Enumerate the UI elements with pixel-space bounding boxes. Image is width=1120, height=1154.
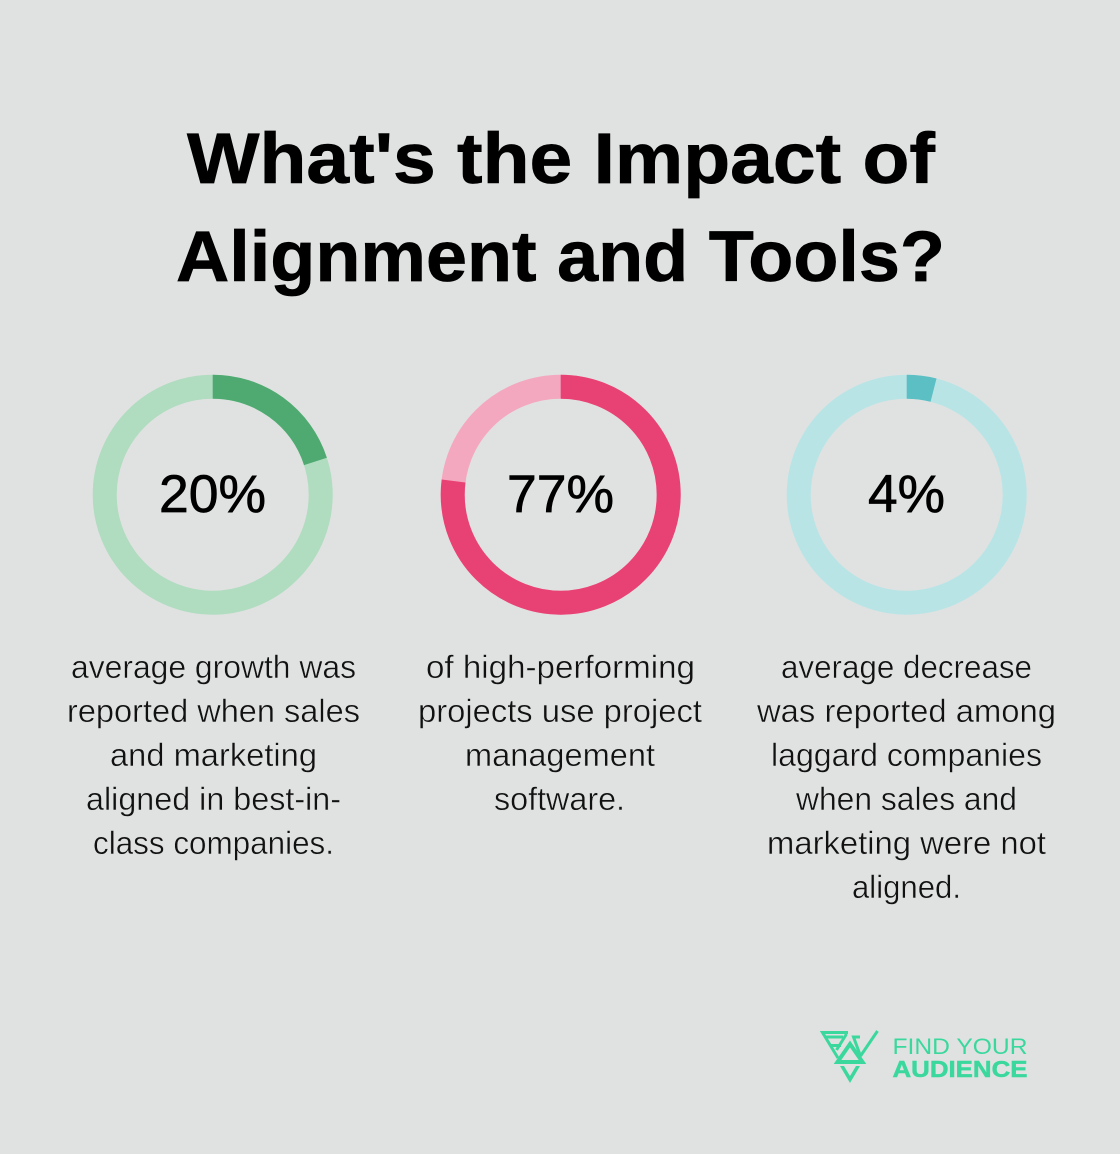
donut chart: 20%: 20% bbox=[159, 465, 266, 524]
description: 77%: of high-performing bbox=[426, 649, 695, 685]
icon: triangles mark bbox=[822, 1031, 878, 1083]
description: 77%: management bbox=[465, 737, 655, 773]
description: 77% bbox=[418, 649, 702, 817]
description: 4%: laggard companies bbox=[771, 737, 1042, 773]
donut chart: 20% bbox=[105, 387, 321, 603]
logo: Find Your Audience: AUDIENCE bbox=[892, 1056, 1028, 1082]
donut chart: 77% bbox=[453, 387, 669, 603]
panel: 4% decrease bbox=[756, 387, 1056, 905]
donut chart: 4% bbox=[799, 387, 1015, 603]
title bbox=[176, 120, 945, 297]
panel: 77% project software bbox=[418, 387, 702, 817]
description: 4%: aligned. bbox=[852, 869, 961, 905]
donut chart: 77%: 77% bbox=[507, 465, 614, 524]
description: 20%: reported when sales bbox=[67, 693, 360, 729]
description: 20%: aligned in best-in- bbox=[86, 781, 341, 817]
description: 77%: software. bbox=[494, 781, 625, 817]
description: 20%: class companies. bbox=[93, 825, 334, 861]
description: 20%: and marketing bbox=[110, 737, 317, 773]
title: Alignment and Tools? bbox=[176, 218, 945, 297]
logo: Find Your Audience bbox=[822, 1031, 1028, 1083]
description: 77%: projects use project bbox=[418, 693, 702, 729]
description: 20% bbox=[67, 649, 360, 861]
description: 4% bbox=[756, 649, 1056, 905]
donut chart: 4%: 4% bbox=[868, 465, 945, 524]
logo text: FIND YOUR bbox=[892, 1034, 1028, 1059]
description: 4%: was reported among bbox=[756, 693, 1056, 729]
description: 20%: average growth was bbox=[71, 649, 356, 685]
description: 4%: average decrease bbox=[781, 649, 1032, 685]
panel: 20% growth bbox=[67, 387, 360, 861]
description: 4%: marketing were not bbox=[767, 825, 1046, 861]
description: 4%: when sales and bbox=[795, 781, 1017, 817]
title: What's the Impact of bbox=[187, 120, 935, 199]
